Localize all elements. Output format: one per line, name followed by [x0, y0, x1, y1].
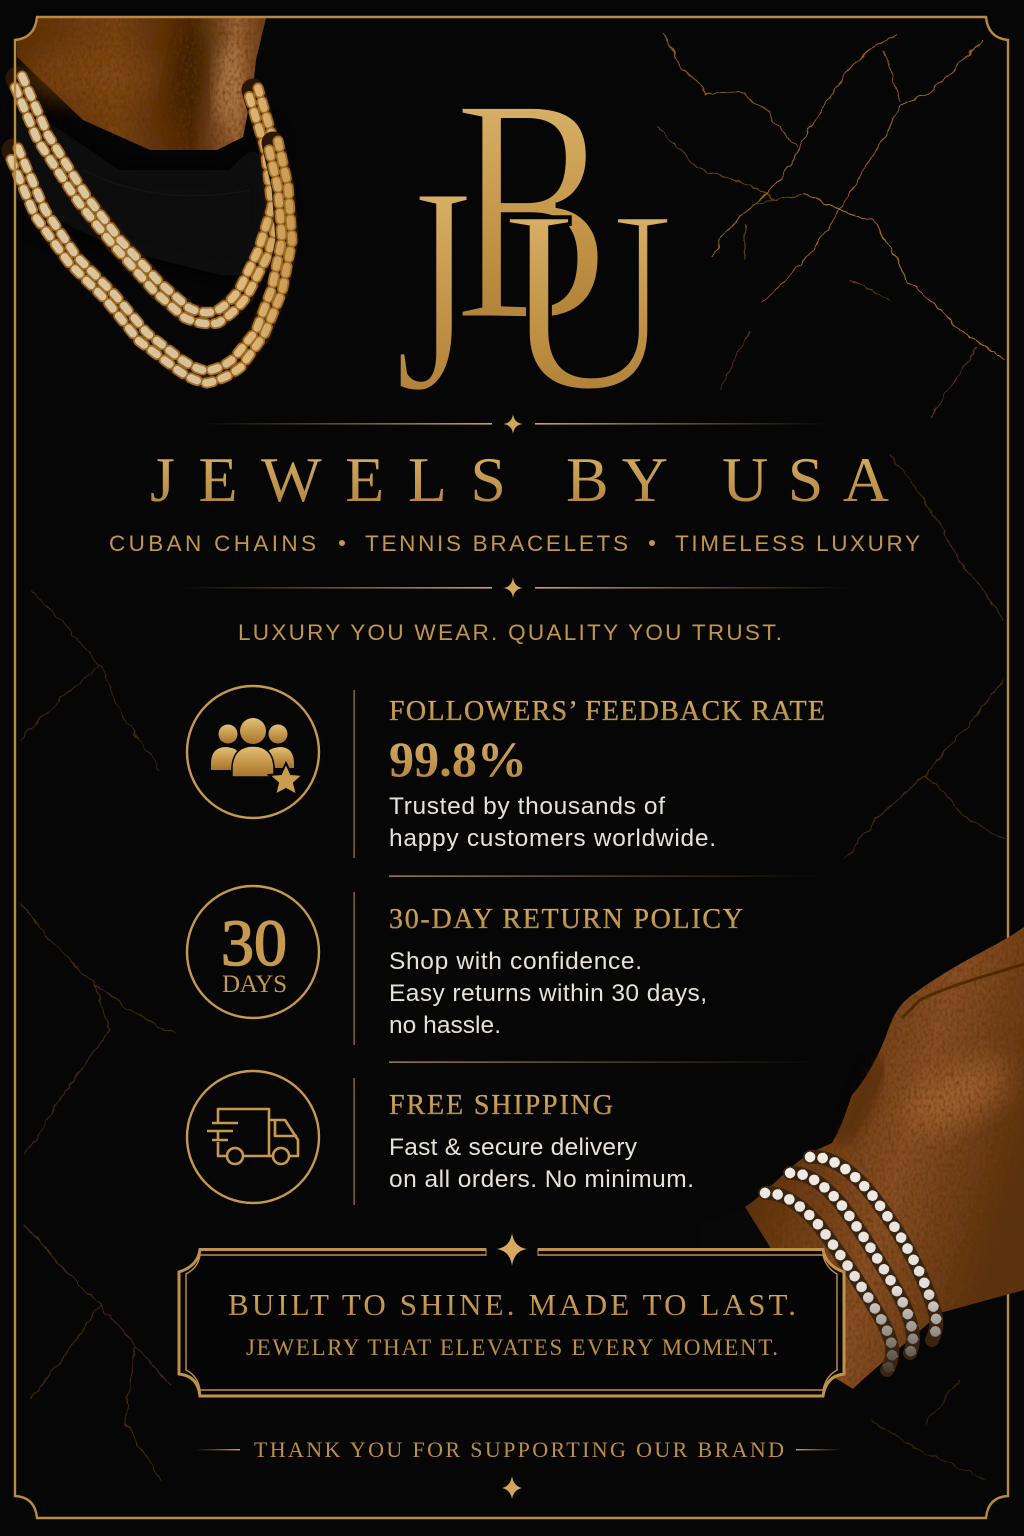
bracelet 1	[810, 1157, 936, 1340]
callout: built to shine	[179, 1233, 844, 1396]
product tagline	[109, 531, 920, 556]
JBU monogram logo	[395, 31, 674, 454]
second ornament divider	[175, 577, 855, 598]
description: Shop with confidence.	[389, 948, 642, 975]
hand with tennis bracelets	[700, 927, 1024, 1389]
collar seam	[250, 190, 251, 191]
divider	[389, 1062, 821, 1063]
top ornament divider	[200, 414, 830, 434]
subline: JEWELRY THAT ELEVATES EVERY MOMENT.	[246, 1335, 778, 1360]
description: on all orders. No minimum.	[389, 1166, 694, 1193]
description: happy customers worldwide.	[389, 825, 716, 852]
stat 99.8%: 99.8%	[389, 731, 527, 787]
product tagline: CUBAN CHAINS	[109, 531, 316, 556]
gap mask and sparkle	[487, 1233, 537, 1266]
headline: BUILT TO SHINE. MADE TO LAST.	[228, 1287, 796, 1322]
description: Easy returns within 30 days,	[389, 980, 707, 1007]
icon: customers with star	[187, 686, 319, 818]
lower chain	[8, 141, 292, 383]
product tagline: TIMELESS LUXURY	[675, 531, 920, 556]
product tagline: TENNIS BRACELETS	[365, 531, 628, 556]
bottom sparkle	[502, 1476, 522, 1499]
description: no hassle.	[389, 1012, 501, 1039]
letter B: B	[454, 31, 611, 389]
hand skin	[745, 927, 1024, 1389]
sleeve	[700, 1206, 775, 1262]
bracelet 3	[765, 1193, 892, 1370]
panel: return policy	[187, 886, 743, 1045]
description	[389, 1134, 694, 1193]
icon: 30 days badge: 30	[221, 907, 287, 980]
slogan: LUXURY YOU WEAR. QUALITY YOU TRUST.	[238, 620, 782, 645]
upper chain	[12, 76, 282, 324]
frame	[179, 1248, 844, 1396]
letter U: U	[503, 156, 674, 445]
heading: FOLLOWERS’ FEEDBACK RATE	[389, 696, 825, 727]
divider	[389, 876, 827, 877]
neck skin	[16, 17, 266, 150]
description: Trusted by thousands of	[389, 793, 665, 820]
letter J: J	[395, 124, 472, 454]
brand name: JEWELS	[150, 444, 506, 515]
brand name	[150, 444, 889, 515]
brand name: USA	[722, 444, 889, 515]
icon: 30 days badge: DAYS	[222, 971, 287, 998]
icon: delivery truck	[187, 1071, 319, 1203]
bracelet 2	[790, 1173, 913, 1353]
description	[389, 948, 707, 1039]
heading: 30-DAY RETURN POLICY	[389, 904, 743, 935]
gold cuban chains	[8, 76, 292, 383]
panel: feedback rate	[187, 686, 825, 858]
shirt	[16, 100, 270, 280]
description: Fast & secure delivery	[389, 1134, 638, 1161]
description	[389, 793, 716, 852]
brand name: BY	[566, 444, 668, 515]
heading: FREE SHIPPING	[389, 1090, 613, 1121]
icon: 30 days badge	[187, 886, 319, 1018]
neck with crew collar	[16, 18, 266, 196]
footer thank-you: THANK YOU FOR SUPPORTING OUR BRAND	[254, 1437, 784, 1462]
panel: free shipping	[187, 1071, 694, 1205]
